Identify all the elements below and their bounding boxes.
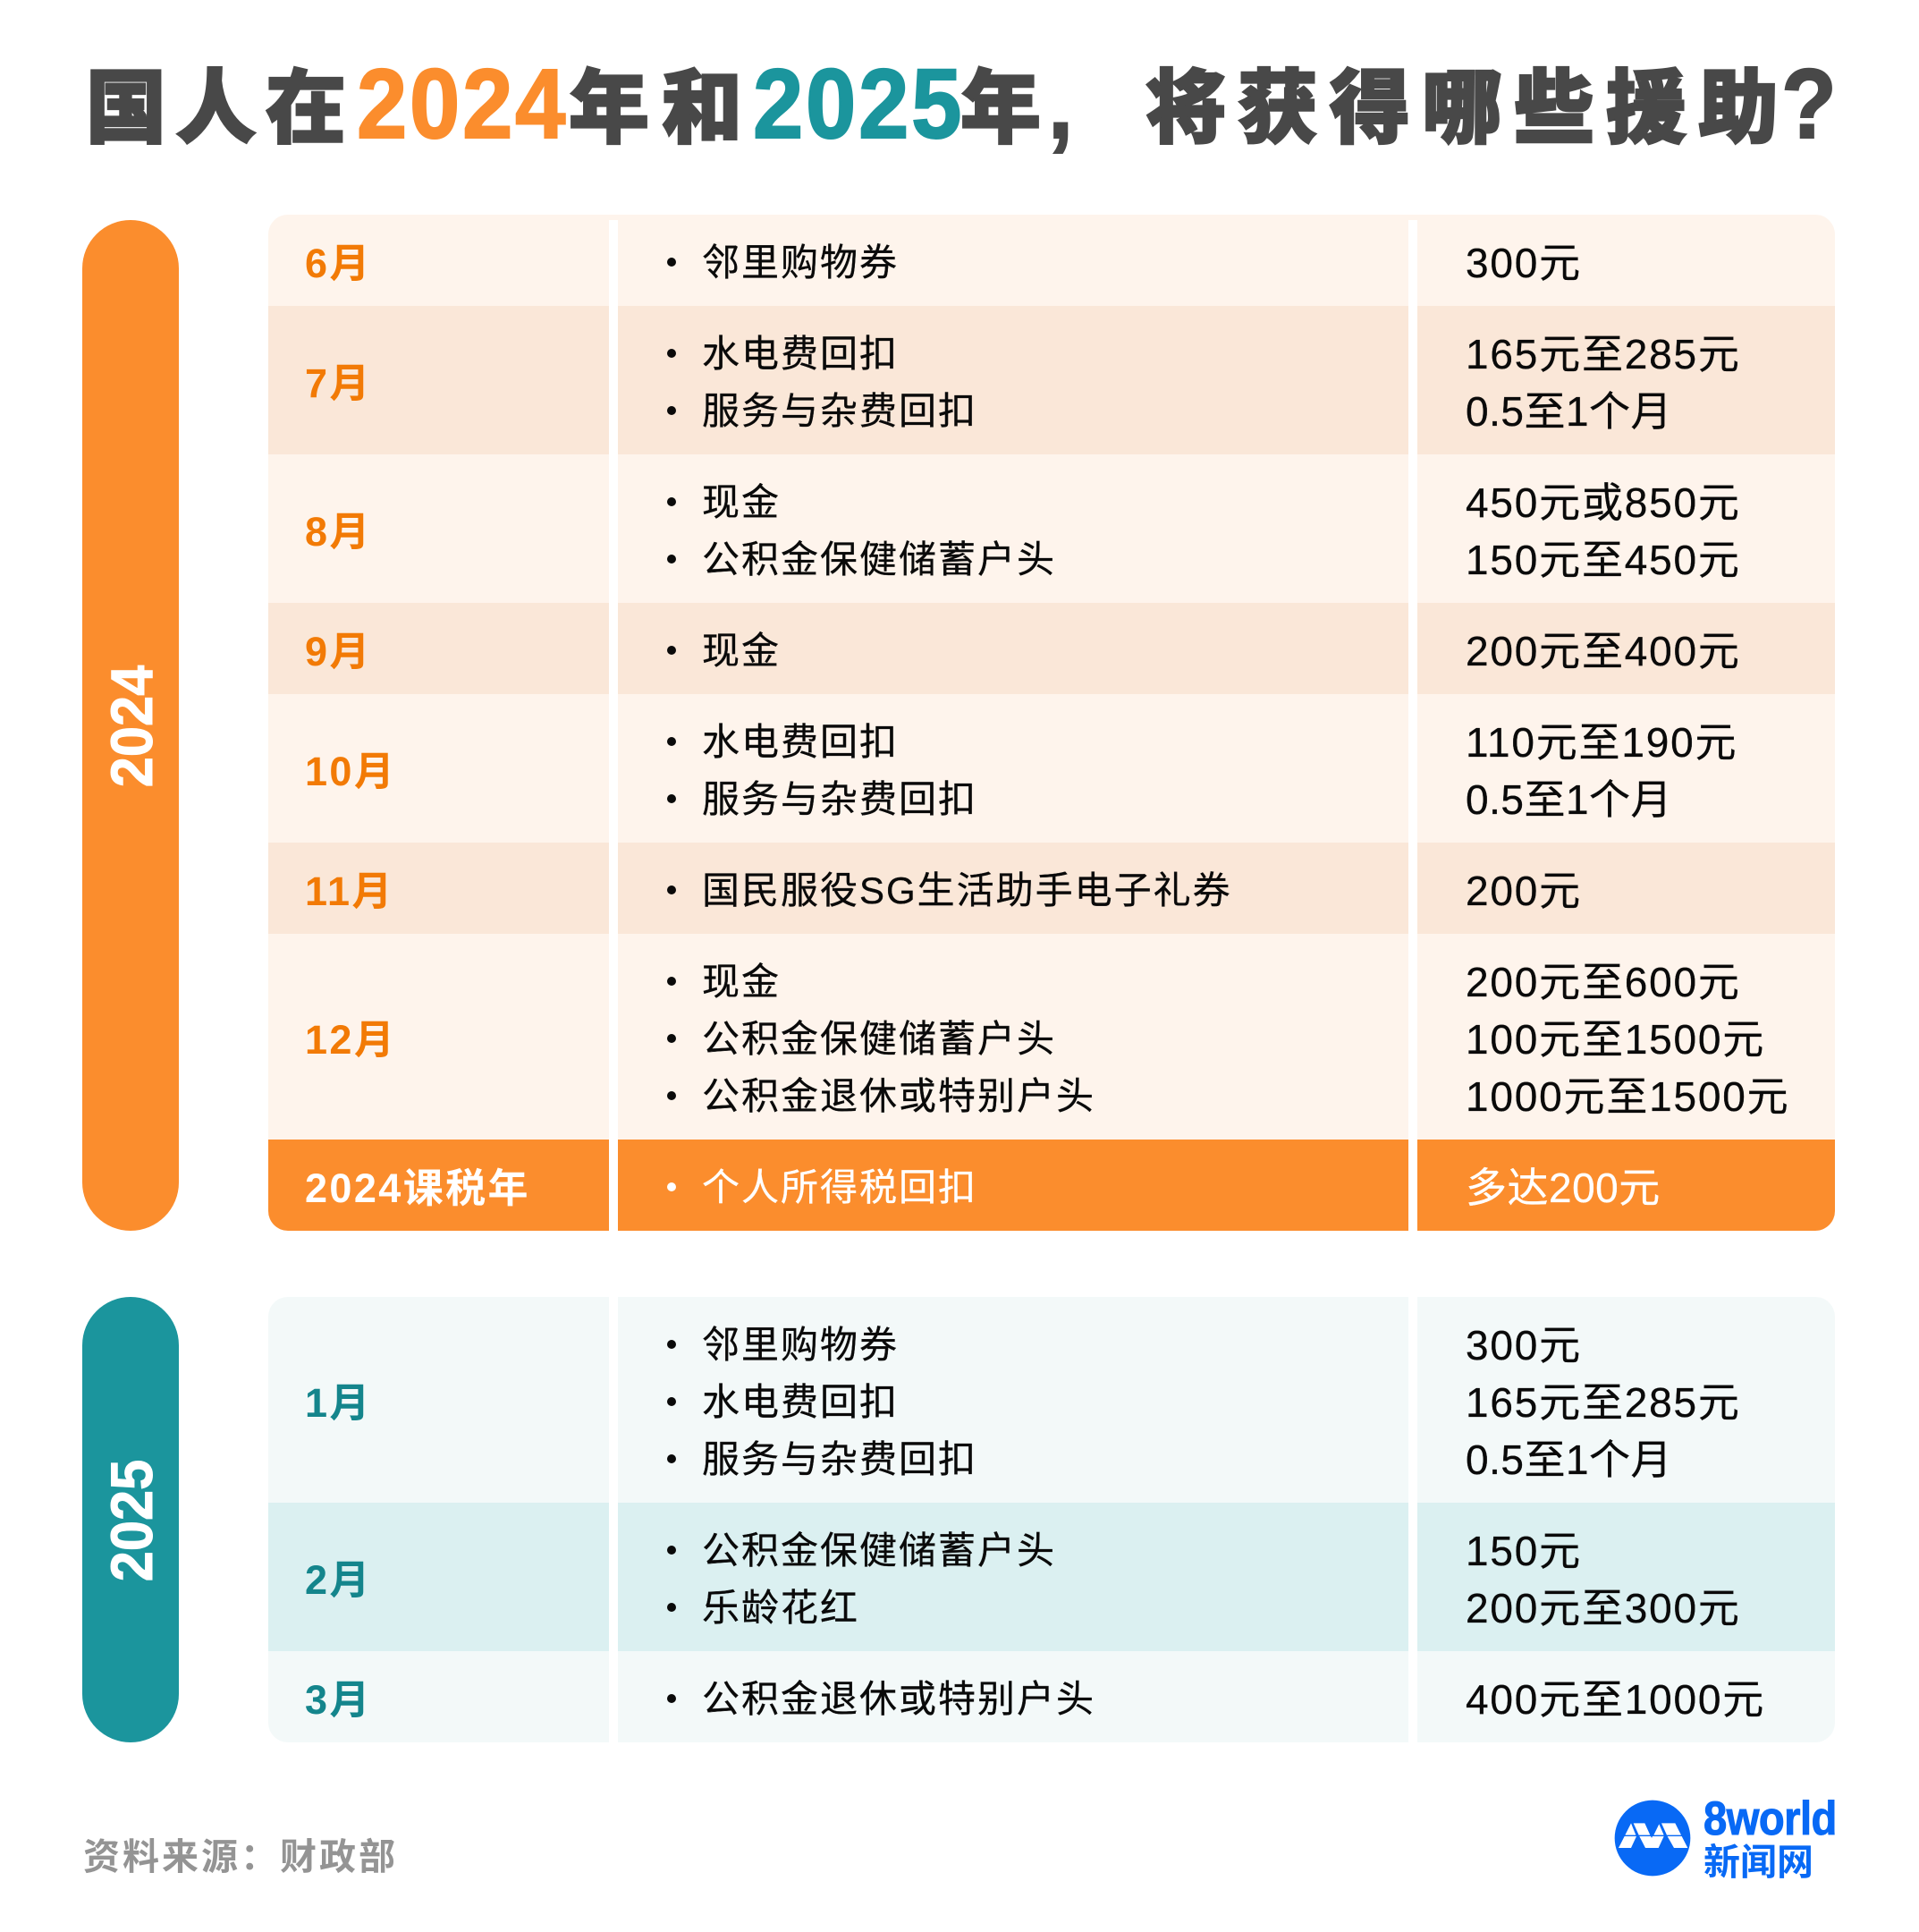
- title: ?: [1781, 49, 1839, 159]
- row: December: 现金: [702, 961, 781, 1003]
- row: November: 11月: [305, 869, 394, 914]
- row: June: 6月: [305, 241, 372, 286]
- row: July: [268, 306, 1835, 454]
- row: December: 100元至1500元: [1466, 1016, 1765, 1063]
- logo wordmark: 8world: [1703, 1792, 1837, 1845]
- source note: 资料来源：财政部: [83, 1826, 398, 1880]
- title: 国人在: [86, 43, 356, 159]
- year pill: 2024: 2024: [98, 665, 165, 787]
- logo: 8world: [1615, 1792, 1837, 1885]
- title: 年和: [569, 43, 755, 159]
- title: [86, 43, 1839, 159]
- row: January: 服务与杂费回扣: [702, 1438, 977, 1480]
- year pill: 2025: [82, 1297, 179, 1742]
- title: 年: [960, 43, 1050, 159]
- row: July: 165元至285元: [1466, 331, 1741, 377]
- row: September: [268, 603, 1835, 694]
- row: December: 12月: [305, 1017, 396, 1063]
- icon: logo circle: [1615, 1800, 1690, 1877]
- row: October: 服务与杂费回扣: [702, 778, 977, 820]
- row: January: 邻里购物券: [702, 1324, 899, 1366]
- logo chinese name: 新闻网: [1703, 1832, 1813, 1885]
- row: August: 公积金保健储蓄户头: [702, 538, 1056, 580]
- row: September: 200元至400元: [1466, 628, 1741, 674]
- row: November: 200元: [1466, 868, 1582, 914]
- row: January: [268, 1297, 1835, 1503]
- row: August: 150元至450元: [1466, 537, 1741, 583]
- row: January: 1月: [305, 1380, 372, 1426]
- row: September: 9月: [305, 629, 372, 674]
- row: June: 300元: [1466, 240, 1582, 286]
- row: August: 450元或850元: [1466, 479, 1741, 526]
- row: February: 公积金保健储蓄户头: [702, 1530, 1056, 1572]
- row: March: [268, 1651, 1835, 1742]
- row: October: 10月: [305, 749, 396, 794]
- row: August: 8月: [305, 509, 372, 555]
- row: October: 水电费回扣: [702, 721, 899, 763]
- row: July: 服务与杂费回扣: [702, 390, 977, 432]
- row: August: [268, 454, 1835, 603]
- year pill: 2024: [82, 220, 179, 1231]
- row: June: 邻里购物券: [702, 242, 899, 284]
- row: 2024 tax year: [268, 1140, 1835, 1231]
- row: July: 0.5至1个月: [1466, 388, 1672, 435]
- row: November: 国民服役SG生活助手电子礼券: [702, 869, 1232, 911]
- row: July: 7月: [305, 360, 372, 406]
- row: December: 公积金保健储蓄户头: [702, 1018, 1056, 1060]
- title: ,: [1048, 49, 1076, 159]
- row: October: [268, 694, 1835, 843]
- row: February: [268, 1503, 1835, 1651]
- row: February: 150元: [1466, 1528, 1582, 1574]
- row: March: 3月: [305, 1677, 372, 1723]
- year pill: 2025: 2025: [98, 1460, 165, 1581]
- row: December: 公积金退休或特别户头: [702, 1075, 1095, 1117]
- row: February: 2月: [305, 1557, 372, 1603]
- row: December: [268, 934, 1835, 1140]
- row: March: 400元至1000元: [1466, 1676, 1765, 1723]
- panel: 2024 table: [268, 215, 1835, 1231]
- row: November: [268, 843, 1835, 934]
- row: January: 0.5至1个月: [1466, 1436, 1672, 1483]
- row: February: 乐龄花红: [702, 1587, 859, 1629]
- row: December: 1000元至1500元: [1466, 1073, 1789, 1120]
- title: 2025: [753, 49, 964, 159]
- row: September: 现金: [702, 630, 781, 672]
- row: October: 0.5至1个月: [1466, 776, 1672, 823]
- row: January: 水电费回扣: [702, 1381, 899, 1423]
- row: December: 200元至600元: [1466, 959, 1741, 1005]
- title: 2024: [357, 49, 568, 159]
- row: June: [268, 215, 1835, 306]
- row: 2024 tax year: 个人所得税回扣: [702, 1166, 977, 1208]
- panel: 2025 table: [268, 1297, 1835, 1742]
- row: February: 200元至300元: [1466, 1585, 1741, 1631]
- row: 2024 tax year: 多达200元: [1466, 1165, 1661, 1211]
- row: 2024 tax year: 2024课税年: [305, 1165, 530, 1211]
- row: October: 110元至190元: [1466, 719, 1737, 766]
- row: August: 现金: [702, 481, 781, 523]
- row: January: 300元: [1466, 1322, 1582, 1368]
- row: July: 水电费回扣: [702, 333, 899, 375]
- row: March: 公积金退休或特别户头: [702, 1678, 1095, 1720]
- row: January: 165元至285元: [1466, 1379, 1741, 1426]
- title: 将获得哪些援助: [1145, 43, 1790, 159]
